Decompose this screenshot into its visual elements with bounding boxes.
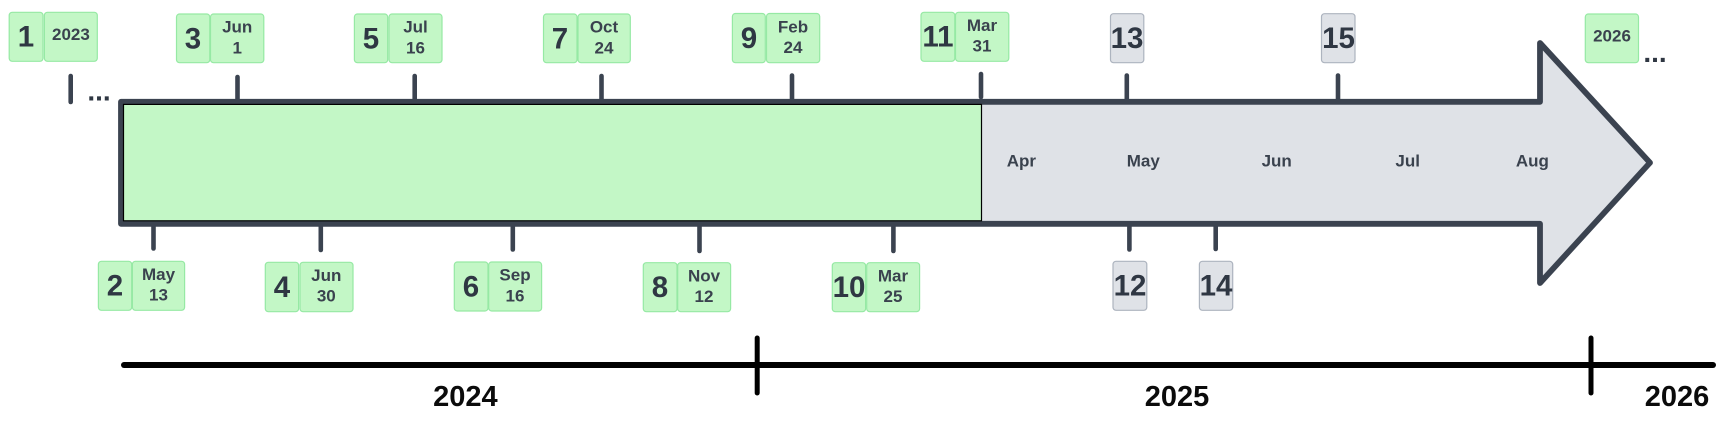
marker 14: 14 (1200, 270, 1233, 303)
marker 1: 2023: 1 (18, 21, 34, 54)
marker 7: Oct 24: 7 (552, 22, 568, 55)
main arrow (121, 43, 1650, 283)
marker 7: Oct 24: 24 (595, 38, 614, 57)
marker 8: Nov 12 (643, 263, 731, 312)
marker 11: Mar 31: Mar (967, 16, 997, 35)
month labels: Jul (1395, 152, 1420, 171)
marker 7: Oct 24: Oct (590, 18, 619, 37)
marker 1: 2023 (9, 12, 97, 61)
marker 3: Jun 1: 1 (232, 38, 242, 57)
ellipsis left: ... (87, 76, 111, 107)
marker 9: Feb 24 (732, 14, 820, 63)
elapsed period fill (124, 104, 982, 221)
marker 10: Mar 25: 25 (884, 287, 902, 306)
year label 2026: 2026 (1645, 381, 1709, 413)
marker 9: Feb 24: Feb (778, 17, 808, 36)
marker 2: May 13: 13 (149, 286, 168, 305)
marker 6: Sep 16: 6 (463, 270, 479, 303)
marker 6: Sep 16: Sep (499, 266, 531, 285)
marker 6: Sep 16 (454, 262, 542, 311)
marker 11: Mar 31 (921, 12, 1009, 61)
marker 14 (1199, 261, 1233, 310)
marker 3: Jun 1: Jun (222, 18, 252, 37)
marker 13 (1110, 14, 1144, 63)
year axis (124, 338, 1713, 393)
marker 5: Jul 16: 5 (363, 22, 379, 55)
marker: 2026: 2026 (1593, 27, 1631, 46)
year label 2025: 2025 (1145, 381, 1209, 413)
marker 10: Mar 25: 10 (833, 271, 865, 304)
tick marks (71, 74, 1338, 251)
month labels: May (1127, 152, 1160, 171)
marker 7: Oct 24 (544, 14, 630, 63)
marker 9: Feb 24: 9 (741, 22, 757, 55)
marker 8: Nov 12: Nov (688, 266, 721, 285)
month labels: Apr (1007, 152, 1036, 171)
marker 2: May 13: 2 (107, 270, 123, 303)
marker 10: Mar 25 (832, 263, 920, 312)
year label 2024: 2024 (433, 381, 498, 413)
marker 5: Jul 16: 16 (406, 38, 425, 57)
marker: 2026 (1585, 14, 1638, 63)
marker 10: Mar 25: Mar (878, 266, 908, 285)
marker 8: Nov 12: 12 (695, 287, 713, 306)
month labels: Jun (1262, 152, 1292, 171)
marker 9: Feb 24: 24 (784, 38, 803, 57)
marker 5: Jul 16: Jul (403, 18, 428, 37)
marker 4: Jun 30: 4 (274, 271, 291, 304)
marker 12: 12 (1114, 270, 1146, 303)
marker 3: Jun 1: 3 (185, 22, 201, 55)
marker 13: 13 (1111, 22, 1143, 55)
marker 2: May 13: May (142, 265, 176, 284)
marker 15 (1322, 14, 1355, 63)
marker 1: 2023: 2023 (52, 25, 90, 44)
marker 12 (1113, 261, 1147, 310)
marker 4: Jun 30: 30 (317, 287, 336, 306)
marker 8: Nov 12: 8 (652, 271, 668, 304)
marker 4: Jun 30: Jun (311, 266, 341, 285)
marker 15: 15 (1322, 22, 1355, 55)
marker 2: May 13 (98, 261, 185, 310)
marker 4: Jun 30 (265, 262, 353, 312)
marker 3: Jun 1 (176, 14, 264, 63)
marker 11: Mar 31: 11 (922, 21, 954, 54)
month labels: Aug (1516, 152, 1549, 171)
marker 6: Sep 16: 16 (506, 286, 524, 305)
month labels (1007, 152, 1549, 171)
marker 11: Mar 31: 31 (973, 37, 991, 56)
ellipsis right: ... (1643, 37, 1667, 68)
marker 5: Jul 16 (354, 14, 442, 63)
